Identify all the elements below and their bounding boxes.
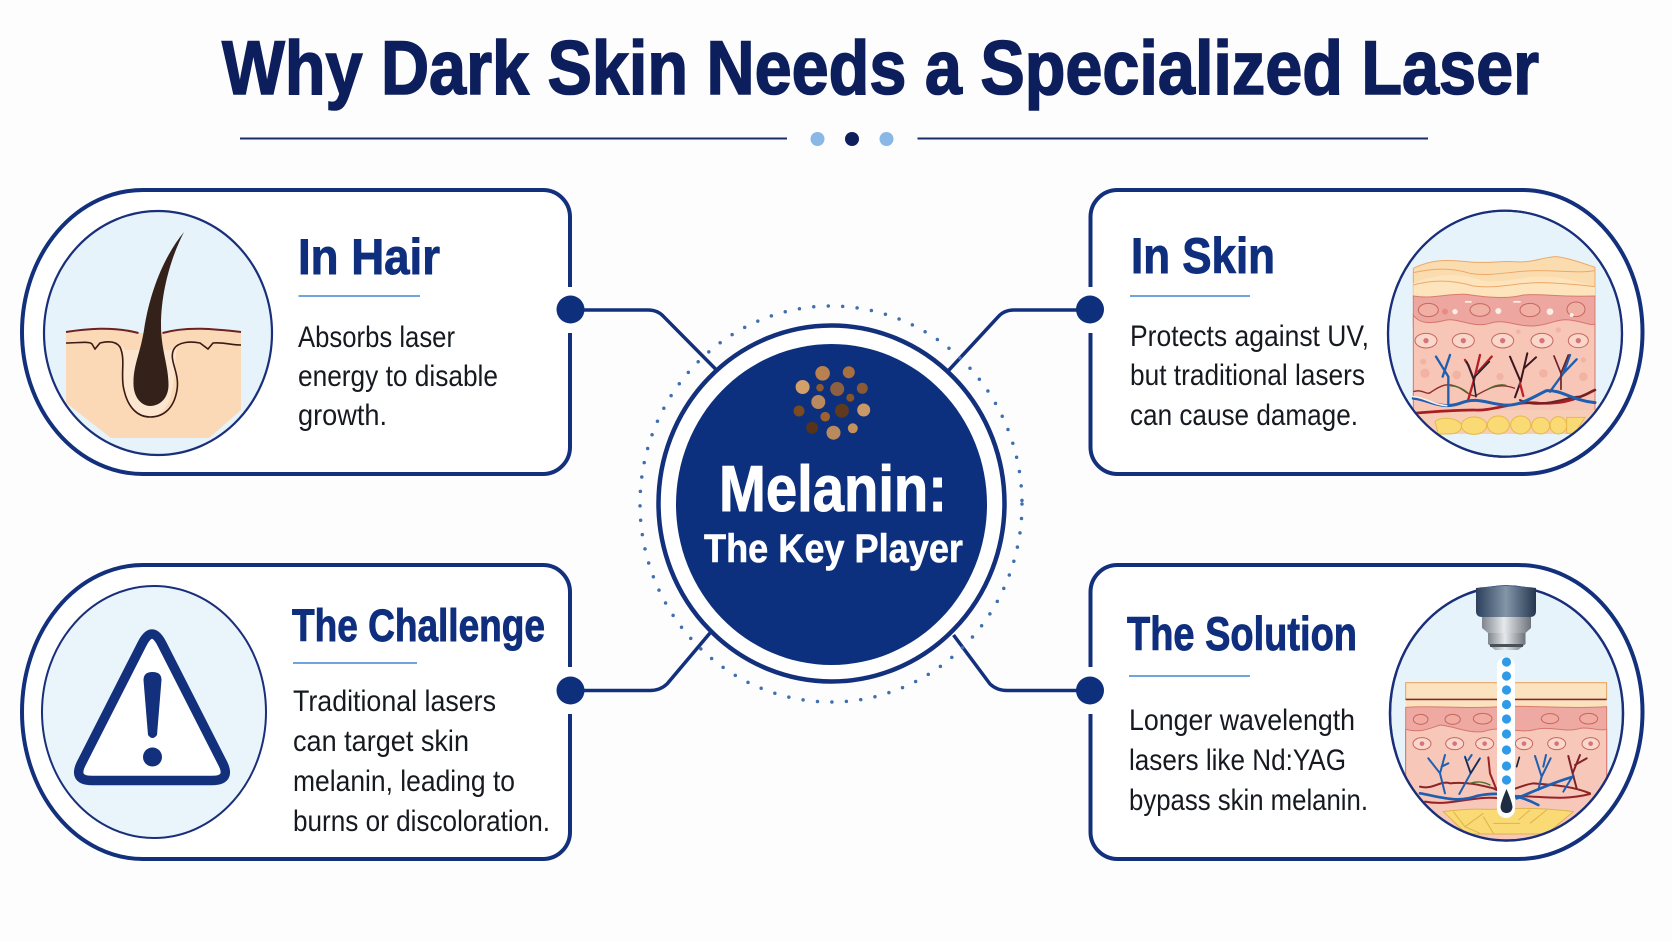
body text: in hair (298, 321, 498, 432)
heading: the challenge: The Challenge (292, 600, 545, 651)
body text: the challenge (293, 685, 550, 838)
body text: the challenge: burns or discoloration. (293, 805, 550, 838)
body text: the solution (1129, 704, 1368, 817)
hub title: Melanin: (719, 452, 947, 525)
connector end dots (556, 296, 1104, 704)
body text: the solution: Longer wavelength (1129, 704, 1355, 737)
body text: in skin: Protects against UV, (1130, 320, 1369, 353)
panel: the solution (1090, 565, 1642, 859)
icon: laser bypassing skin (1390, 586, 1623, 843)
centre hub: melanin (640, 306, 1022, 702)
heading: in hair: In Hair (298, 229, 440, 285)
icon: warning triangle (42, 586, 266, 838)
body text: the challenge: can target skin (293, 725, 469, 758)
laser handpiece (1476, 586, 1536, 650)
connector lines to centre (570, 310, 1090, 690)
body text: the solution: lasers like Nd:YAG (1129, 744, 1346, 777)
body text: the challenge: melanin, leading to (293, 765, 515, 798)
panel: in skin (1090, 190, 1642, 474)
icon: hair follicle (44, 211, 272, 455)
heading: in skin: In Skin (1131, 228, 1275, 284)
body text: the challenge: Traditional lasers (293, 685, 496, 718)
body text: in skin (1130, 320, 1369, 432)
heading: the solution: The Solution (1127, 607, 1357, 660)
laser beam with blue dots (1497, 657, 1515, 818)
body text: in skin: but traditional lasers (1130, 359, 1365, 392)
body text: in hair: energy to disable (298, 360, 498, 393)
title divider with three dots (240, 132, 1428, 146)
body text: in hair: Absorbs laser (298, 321, 455, 354)
body text: in skin: can cause damage. (1130, 399, 1358, 432)
body text: the solution: bypass skin melanin. (1129, 784, 1368, 817)
hub subtitle: The Key Player (704, 527, 963, 571)
panel: the challenge (22, 565, 570, 859)
body text: in hair: growth. (298, 399, 387, 432)
panel: in hair (22, 190, 570, 474)
icon: melanin granules (794, 366, 870, 440)
icon: skin cross-section (1388, 211, 1622, 457)
